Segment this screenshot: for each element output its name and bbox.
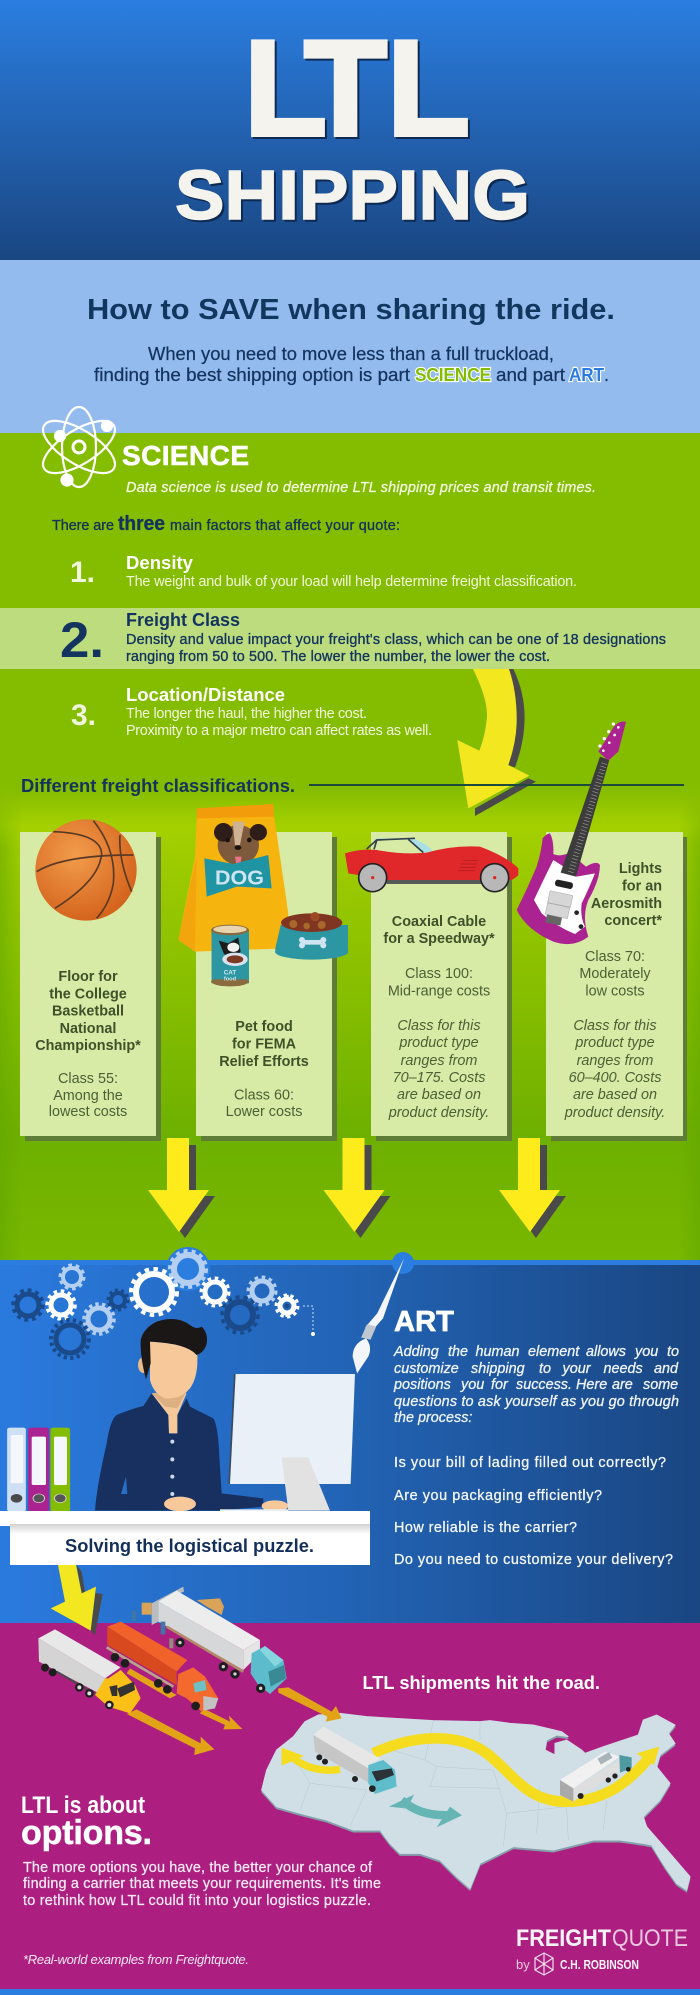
- footnote: *Real-world examples from Freightquote.: [23, 1952, 249, 1967]
- truck on map, west: [313, 1727, 397, 1794]
- card 1: basketball floor: Championship*: [35, 1038, 141, 1054]
- card 3: coaxial cable: for a Speedway*: [383, 931, 495, 947]
- icon: paint brush: [353, 1258, 404, 1373]
- curved yellow arrow: [457, 669, 536, 816]
- icon: C.H. Robinson mark: [535, 1953, 553, 1975]
- card 1: basketball floor: [20, 832, 161, 1141]
- card 4: concert lights: product density.: [564, 1105, 665, 1121]
- card 4: concert lights: product type: [574, 1035, 655, 1051]
- card 4: concert lights: Aerosmith: [591, 896, 662, 912]
- card 3: coaxial cable: Mid-range costs: [388, 984, 490, 1000]
- factor 1: density: Density: [126, 553, 193, 573]
- factor 2 highlighted band: ranging from 50 to 500. The lower the number, the lower the cost.: [126, 649, 550, 665]
- card 3: coaxial cable: [371, 832, 512, 1141]
- art description: some: [643, 1377, 678, 1393]
- card 4: concert lights: are based on: [573, 1087, 657, 1103]
- card 4: concert lights: Lights: [619, 861, 662, 877]
- science description: Data science is used to determine LTL shipping prices and transit times.: [126, 480, 596, 496]
- intro text: and part: [496, 365, 565, 385]
- art questions: Do you need to customize your delivery?: [394, 1552, 673, 1568]
- icon: gears: [13, 1251, 315, 1358]
- card 4: concert lights: Class 70:: [585, 949, 645, 965]
- logo: Freightquote by C.H. Robinson: C.H. ROBINSON: [560, 1957, 639, 1972]
- arrow 2: [330, 1145, 390, 1238]
- orange truck: [107, 1622, 218, 1712]
- intro text: When you need to move less than a full truckload,: [148, 344, 554, 364]
- dog food bag: DOG: [215, 866, 264, 889]
- card 3: coaxial cable: ranges from: [401, 1053, 477, 1069]
- card 4: concert lights: 60–400. Costs: [569, 1070, 661, 1086]
- cat food can: food: [224, 976, 237, 982]
- cat food can: CAT: [224, 969, 236, 976]
- icon: red sports car: [345, 838, 518, 892]
- computer monitor: [220, 1374, 355, 1511]
- art description: to: [667, 1344, 679, 1360]
- card 4: concert lights: ranges from: [577, 1053, 653, 1069]
- art description: the: [448, 1344, 468, 1360]
- art description: customize: [394, 1361, 459, 1377]
- art description: to: [539, 1361, 551, 1377]
- card 1: basketball floor: the College: [49, 986, 127, 1002]
- intro text: .: [604, 365, 609, 385]
- card 3: coaxial cable: Class for this: [397, 1018, 481, 1034]
- logo: Freightquote by C.H. Robinson: QUOTE: [612, 1925, 688, 1952]
- art description: are: [612, 1377, 633, 1393]
- art description: shipping: [471, 1361, 525, 1377]
- art description: you: [460, 1377, 484, 1393]
- card 1: basketball floor: Class 55:: [58, 1071, 118, 1087]
- options text: to rethink how LTL could fit into your logistics puzzle.: [23, 1893, 371, 1909]
- panel: science: [0, 433, 700, 1260]
- intro text: [94, 344, 609, 385]
- card 2: pet food: [196, 832, 337, 1141]
- blue-cab truck: [152, 1587, 287, 1694]
- panel: art: [0, 1247, 700, 1623]
- options text: finding a carrier that meets your requirements. It's time: [23, 1876, 381, 1892]
- arrows between cards and art: [148, 1138, 566, 1238]
- card 4: concert lights: for an: [622, 878, 662, 894]
- art questions: [394, 1455, 673, 1568]
- title: LTL: LTL: [244, 12, 470, 164]
- options text: The more options you have, the better your chance of: [23, 1860, 373, 1876]
- card 2: pet food: Class 60:: [234, 1088, 294, 1104]
- card 4: concert lights: Class for this: [573, 1018, 657, 1034]
- art description: positions: [393, 1377, 451, 1393]
- card 4: concert lights: low costs: [585, 984, 645, 1000]
- panel: options: [0, 1565, 700, 1995]
- intro text: ART: [569, 365, 604, 385]
- factors intro: main factors that affect your quote:: [170, 518, 400, 534]
- options heading: options.: [21, 1814, 152, 1852]
- factor 2 highlighted band: Freight Class: [126, 610, 240, 630]
- art description: Adding: [393, 1344, 439, 1360]
- card 1: basketball floor: National: [60, 1021, 116, 1037]
- art description: questions to ask yourself as you go through: [394, 1394, 679, 1410]
- factor 2 highlighted band: 2.: [60, 612, 104, 668]
- art description: success.: [516, 1377, 572, 1393]
- factor 3: location and distance: 3.: [71, 699, 96, 732]
- art heading: ART: [394, 1306, 454, 1338]
- freight classifications heading: Different freight classifications.: [21, 776, 295, 796]
- logo: Freightquote by C.H. Robinson: by: [516, 1957, 530, 1972]
- art questions: Is your bill of lading filled out correctly?: [394, 1455, 666, 1471]
- icon: atom: [35, 407, 123, 487]
- options heading: LTL is about: [21, 1792, 145, 1819]
- logo: Freightquote by C.H. Robinson: [516, 1925, 688, 1975]
- arrow 1: [154, 1145, 215, 1238]
- card 2: pet food: for FEMA: [232, 1036, 297, 1052]
- art questions: Are you packaging efficiently?: [394, 1488, 602, 1504]
- factor 3: location and distance: Location/Distance: [126, 685, 285, 705]
- dog food bag: [178, 804, 288, 952]
- art description: and: [654, 1361, 679, 1377]
- title: SHIPPING: SHIPPING: [175, 156, 530, 234]
- factor 2 highlighted band: Density and value impact your freight's class, which can be one of 18 designations: [126, 632, 666, 648]
- map of the United States: [262, 1713, 690, 1890]
- factors intro: There are: [52, 518, 114, 534]
- card 2: pet food: Lower costs: [226, 1104, 302, 1120]
- truck on map, east: [560, 1752, 632, 1802]
- card 3: coaxial cable: product type: [398, 1035, 479, 1051]
- caption panel: Solving the logistical puzzle.: [65, 1536, 314, 1556]
- card 3: coaxial cable: Coaxial Cable: [392, 914, 486, 930]
- card 3: coaxial cable: are based on: [397, 1087, 481, 1103]
- pet food bowl: [275, 912, 348, 960]
- card 1: basketball floor: Floor for: [58, 969, 118, 985]
- art questions: How reliable is the carrier?: [394, 1520, 577, 1536]
- subtitle heading: How to SAVE when sharing the ride.: [87, 294, 615, 326]
- card 2: pet food: Relief Efforts: [219, 1054, 309, 1070]
- art description: Here: [576, 1377, 607, 1393]
- art description: your: [562, 1361, 592, 1377]
- art description: allows: [586, 1344, 626, 1360]
- yellow arrow from puzzle panel: [51, 1565, 103, 1635]
- workers loading: [132, 1603, 173, 1648]
- card 1: basketball floor: lowest costs: [49, 1104, 127, 1120]
- caption panel: [0, 1511, 370, 1565]
- intro text: SCIENCE: [415, 365, 491, 385]
- logo: Freightquote by C.H. Robinson: FREIGHT: [516, 1925, 611, 1952]
- trucks and small arrows: [38, 1565, 342, 1755]
- person: [95, 1319, 288, 1512]
- card 1: basketball floor: Among the: [53, 1088, 123, 1104]
- science heading: SCIENCE: [122, 440, 249, 471]
- intro panel: [0, 260, 700, 433]
- header banner: [0, 0, 700, 260]
- factor 2 highlighted band: [0, 608, 700, 669]
- icon: electric guitar: [517, 722, 626, 944]
- options heading: [21, 1792, 152, 1852]
- card 2: pet food: Pet food: [235, 1019, 293, 1035]
- yellow truck: [38, 1629, 141, 1713]
- card 3: coaxial cable: product density.: [388, 1105, 489, 1121]
- factor 1: density: 1.: [70, 556, 95, 589]
- options text: [23, 1860, 381, 1909]
- card 4: concert lights: [546, 832, 687, 1141]
- art description: human: [476, 1344, 520, 1360]
- art description: [393, 1344, 679, 1426]
- art description: the process:: [394, 1410, 472, 1426]
- factor 3: location and distance: [71, 685, 432, 739]
- arrow 3: [505, 1145, 566, 1238]
- factors intro: three: [118, 513, 165, 535]
- cat food can: [211, 925, 249, 986]
- icon: basketball: [35, 819, 137, 921]
- factor 3: location and distance: The longer the haul, the higher the cost.: [126, 706, 367, 722]
- art description: for: [491, 1377, 509, 1393]
- map route arrows: [282, 1738, 659, 1827]
- factor 1: density: The weight and bulk of your load will help determine freight classification.: [126, 574, 577, 590]
- card 4: concert lights: concert*: [604, 913, 662, 929]
- art description: element: [528, 1344, 580, 1360]
- factors intro: [52, 513, 400, 535]
- road heading: LTL shipments hit the road.: [362, 1673, 600, 1693]
- art description: you: [634, 1344, 658, 1360]
- illustration: man at computer: [95, 1319, 355, 1512]
- card 3: coaxial cable: Class 100:: [405, 966, 473, 982]
- factor 3: location and distance: Proximity to a major metro can affect rates as well.: [126, 723, 432, 739]
- card 3: coaxial cable: 70–175. Costs: [393, 1070, 485, 1086]
- art description: needs: [604, 1361, 643, 1377]
- intro text: finding the best shipping option is part: [94, 365, 410, 385]
- illustration: binders: [7, 1428, 70, 1512]
- factor 1: density: [70, 553, 577, 590]
- icon: pet food bag, can and bowl: [178, 804, 348, 986]
- card 1: basketball floor: Basketball: [52, 1004, 124, 1020]
- card 4: concert lights: Moderately: [579, 966, 651, 982]
- road arrows: [127, 1668, 342, 1755]
